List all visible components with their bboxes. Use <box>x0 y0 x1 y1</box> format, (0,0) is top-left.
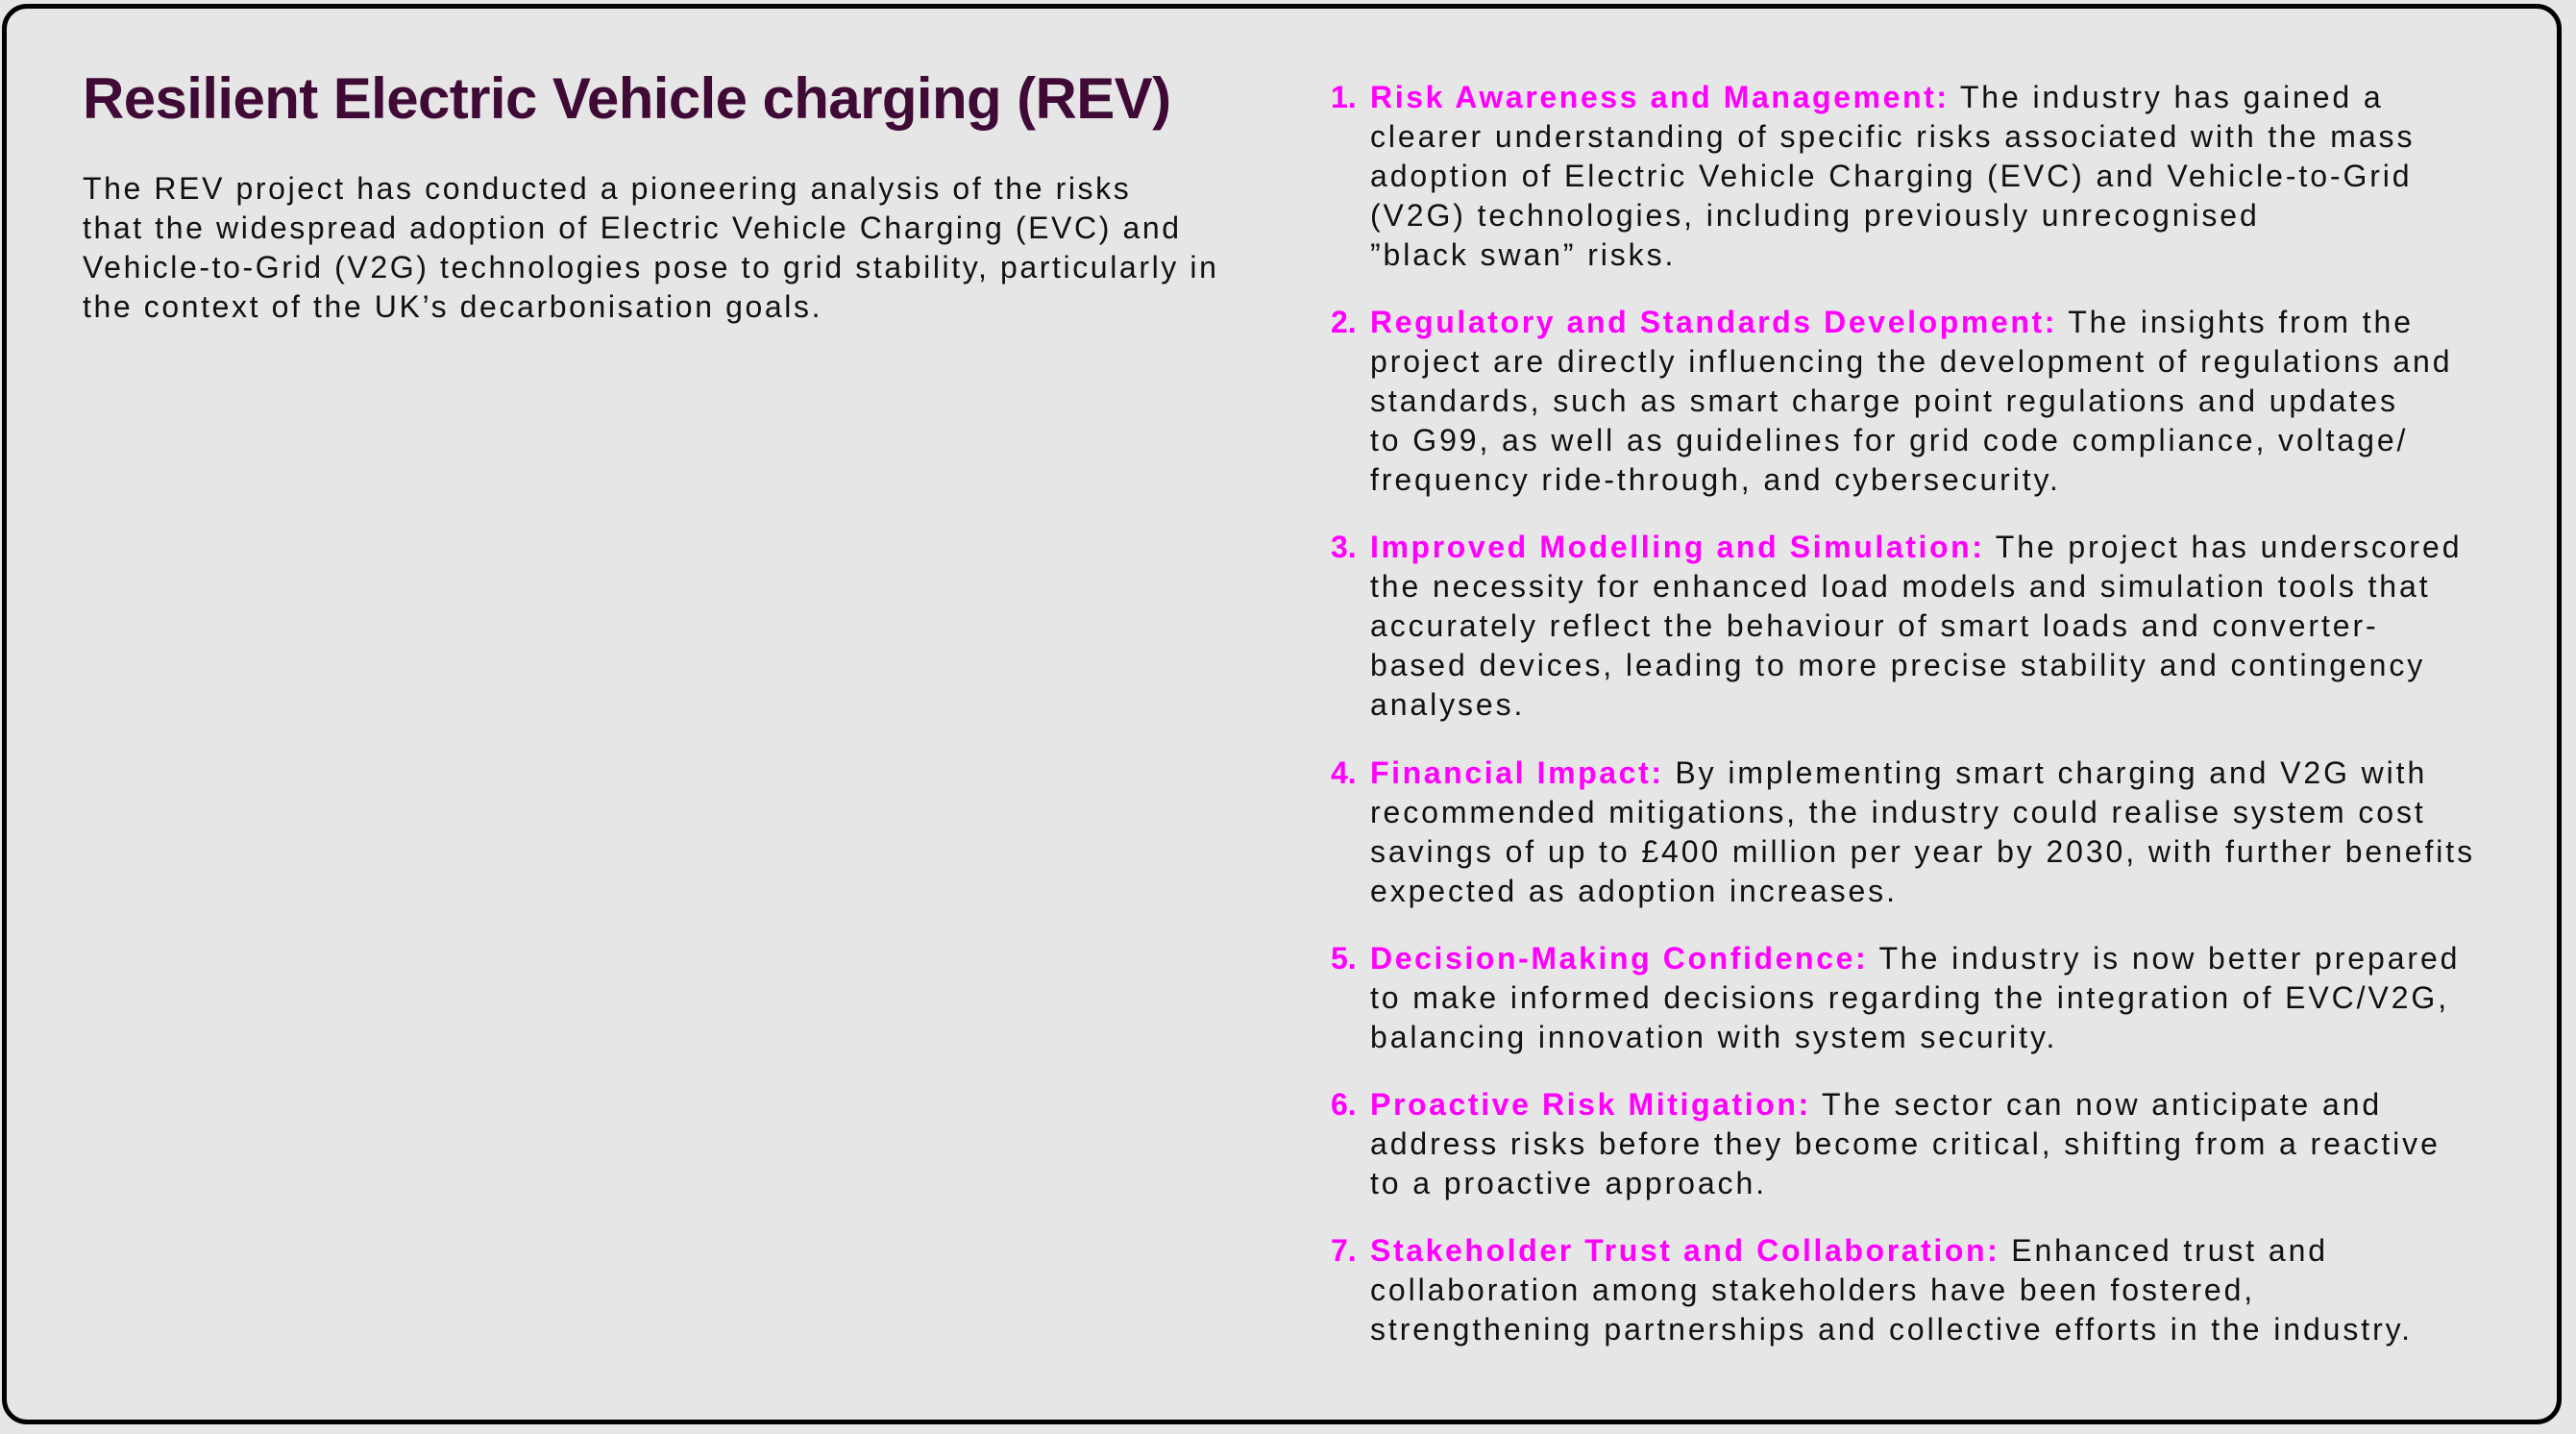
list item 2: frequency ride-through, and cybersecurity. <box>1370 462 2061 497</box>
list item 2: standards, such as smart charge point regulations and updates <box>1370 383 2398 418</box>
list item 3: 3. <box>1331 530 1357 564</box>
list item 1: (V2G) technologies, including previously unrecognised <box>1370 198 2260 233</box>
list item 5: Decision-Making Confidence: The industry is now better prepared <box>1370 941 2460 976</box>
list item 1 <box>1331 80 2415 272</box>
list item 6: to a proactive approach. <box>1370 1166 1767 1200</box>
list item 1: adoption of Electric Vehicle Charging (EVC) and Vehicle-to-Grid <box>1370 159 2412 193</box>
list item 3: analyses. <box>1370 687 1525 722</box>
list item 2 <box>1331 305 2452 497</box>
list item 3: accurately reflect the behaviour of smart loads and converter- <box>1370 608 2379 643</box>
list item 4: recommended mitigations, the industry could realise system cost <box>1370 795 2426 829</box>
list item 3: the necessity for enhanced load models and simulation tools that <box>1370 569 2431 604</box>
list item 2: Regulatory and Standards Development: The insights from the <box>1370 305 2414 339</box>
title: Resilient Electric Vehicle charging (REV) <box>83 66 1170 131</box>
list item 1: Risk Awareness and Management: The industry has gained a <box>1370 80 2384 114</box>
list item 4: expected as adoption increases. <box>1370 874 1898 908</box>
text block: intro <box>83 171 1218 324</box>
list item 1: clearer understanding of specific risks associated with the mass <box>1370 119 2415 154</box>
list item 2: project are directly influencing the development of regulations and <box>1370 344 2452 379</box>
list item 4: savings of up to £400 million per year by 2030, with further benefits <box>1370 834 2475 869</box>
text block: intro: Vehicle-to-Grid (V2G) technologies pose to grid stability, particularly in <box>83 250 1218 284</box>
list item 7: 7. <box>1331 1233 1357 1268</box>
text block: intro: the context of the UK’s decarbonisation goals. <box>83 289 822 324</box>
list item 4 <box>1331 755 2475 908</box>
list item 3: based devices, leading to more precise stability and contingency <box>1370 648 2425 682</box>
list item 6: Proactive Risk Mitigation: The sector can now anticipate and <box>1370 1087 2382 1122</box>
text block: intro: that the widespread adoption of Electric Vehicle Charging (EVC) and <box>83 210 1182 245</box>
list item 7 <box>1331 1233 2413 1347</box>
list item 2: to G99, as well as guidelines for grid code compliance, voltage/ <box>1370 423 2408 457</box>
list item 2: 2. <box>1331 305 1357 339</box>
text block: intro: The REV project has conducted a pioneering analysis of the risks <box>83 171 1131 206</box>
list item 3 <box>1331 530 2462 722</box>
list item 4: Financial Impact: By implementing smart charging and V2G with <box>1370 755 2427 790</box>
list item 7: collaboration among stakeholders have been fostered, <box>1370 1273 2255 1307</box>
list item 7: Stakeholder Trust and Collaboration: Enhanced trust and <box>1370 1233 2328 1268</box>
list item 6 <box>1331 1087 2441 1200</box>
list item 7: strengthening partnerships and collective efforts in the industry. <box>1370 1312 2413 1347</box>
list item 3: Improved Modelling and Simulation: The project has underscored <box>1370 530 2462 564</box>
list item 4: 4. <box>1331 755 1357 790</box>
list item 5: 5. <box>1331 941 1357 976</box>
list item 5: to make informed decisions regarding the integration of EVC/V2G, <box>1370 980 2449 1015</box>
list item 1: 1. <box>1331 80 1357 114</box>
list item 6: address risks before they become critical, shifting from a reactive <box>1370 1126 2441 1161</box>
list item 5: balancing innovation with system security. <box>1370 1020 2057 1054</box>
list item 6: 6. <box>1331 1087 1357 1122</box>
list item 5 <box>1331 941 2460 1054</box>
list item 1: ”black swan” risks. <box>1370 237 1676 272</box>
